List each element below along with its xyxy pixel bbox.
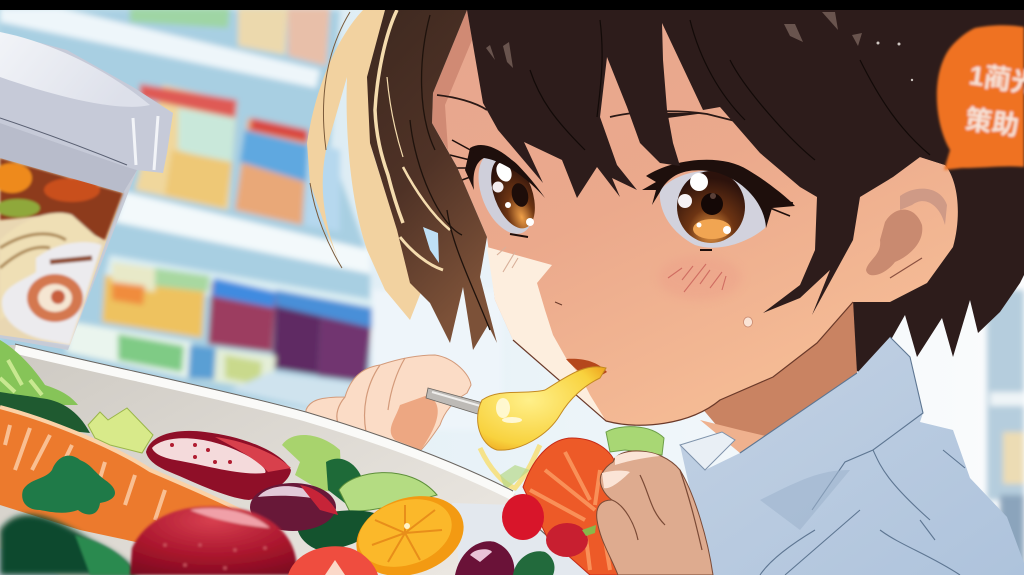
top black bar (0, 0, 1024, 10)
spoon with yellow food (426, 367, 606, 490)
lid side (0, 32, 173, 173)
salmon (0, 407, 245, 545)
halved orange (346, 483, 474, 575)
broccoli (282, 435, 437, 550)
lettuce behind tomato (606, 427, 664, 455)
large strawberry (130, 506, 297, 575)
hair shine (486, 12, 862, 68)
beet slice (146, 431, 291, 500)
shirt and collar (680, 337, 1024, 575)
neck (695, 300, 857, 453)
hair: left side lock (307, 10, 497, 350)
container: noodle cup with lid (0, 32, 173, 350)
cup band under the lid (0, 123, 137, 193)
lime slice (88, 408, 153, 453)
plum (250, 483, 338, 531)
blonde highlights in the brown hair (375, 10, 403, 223)
right eye (642, 160, 795, 250)
mouth (566, 359, 607, 382)
bowl (0, 340, 640, 575)
hair: back of the head (780, 10, 1024, 383)
hand holding spoon (306, 355, 471, 450)
strawberry slice (288, 546, 378, 575)
tomato (502, 438, 640, 575)
blush marks (497, 247, 726, 292)
lettuce (0, 340, 90, 433)
ear detail (866, 189, 947, 278)
dark berries (455, 541, 554, 575)
hair: bangs (467, 10, 1024, 315)
right hand holding tomato (597, 451, 713, 575)
lid top surface (0, 32, 150, 107)
left eye (450, 140, 545, 242)
green herbs (0, 456, 138, 575)
bubble text (963, 60, 1024, 141)
speech bubble (937, 25, 1024, 170)
sweat drop (744, 317, 752, 327)
bubble text: 策助 (963, 104, 1021, 141)
lit side of the face (487, 247, 606, 421)
eyebrows (437, 95, 763, 128)
face (432, 10, 958, 425)
